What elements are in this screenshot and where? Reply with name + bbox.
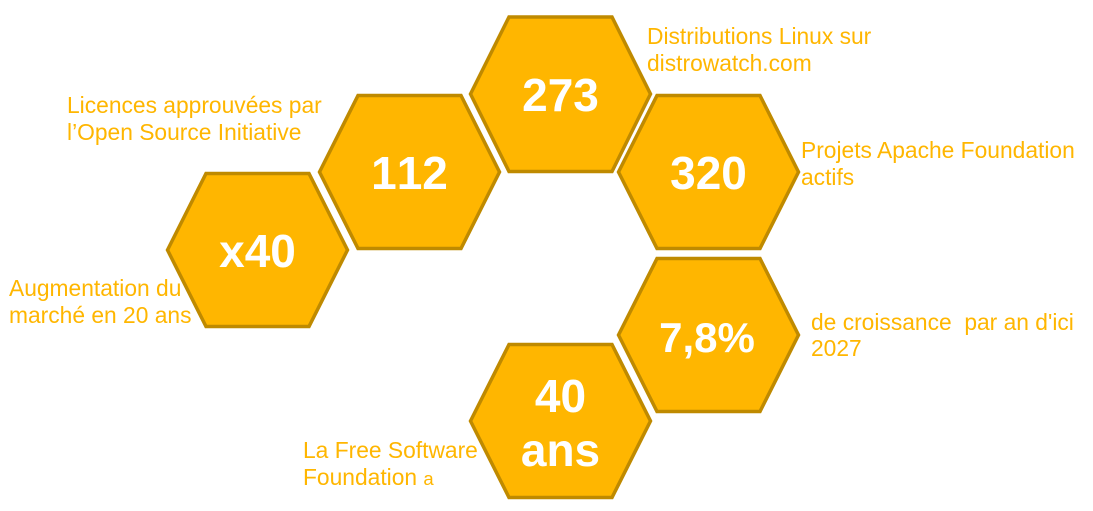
- label: Apache projects: Projets Apache Foundation: [801, 137, 1075, 163]
- label: Free Software Foundation: Foundation: [303, 464, 423, 490]
- hexagon: 40 ans: 40: [535, 370, 586, 422]
- hexagon: 273: [470, 17, 650, 172]
- label: distributions Linux: Distributions Linux sur: [647, 23, 871, 49]
- hexagon: 7,8%: 7,8%: [659, 314, 755, 361]
- label: market growth: marché en 20 ans: [9, 302, 192, 328]
- label: annual growth: 2027: [811, 335, 862, 361]
- label: Apache projects: actifs: [801, 164, 854, 190]
- label: OSI licences: Licences approuvées par: [67, 92, 322, 118]
- hexagon: 7,8%: [618, 258, 798, 412]
- hexagon: x40: x40: [219, 225, 296, 277]
- label: Free Software Foundation: La Free Software: [303, 437, 478, 463]
- hexagon: x40: [168, 174, 348, 326]
- hexagon: 112: 112: [371, 147, 448, 199]
- hexagon: 112: [320, 96, 500, 248]
- hexagon: 320: [618, 96, 798, 248]
- hexagon: 273: 273: [522, 69, 599, 121]
- hexagon: 40 ans: [470, 344, 650, 498]
- label: OSI licences: l’Open Source Initiative: [67, 119, 301, 145]
- label: Free Software Foundation: a: [423, 468, 434, 489]
- label: annual growth: de croissance par an d'ici: [811, 309, 1074, 335]
- label: market growth: Augmentation du: [9, 275, 181, 301]
- hexagon: 320: 320: [670, 147, 747, 199]
- label: distributions Linux: distrowatch.com: [647, 50, 812, 76]
- hexagon: 40 ans: ans: [521, 424, 600, 476]
